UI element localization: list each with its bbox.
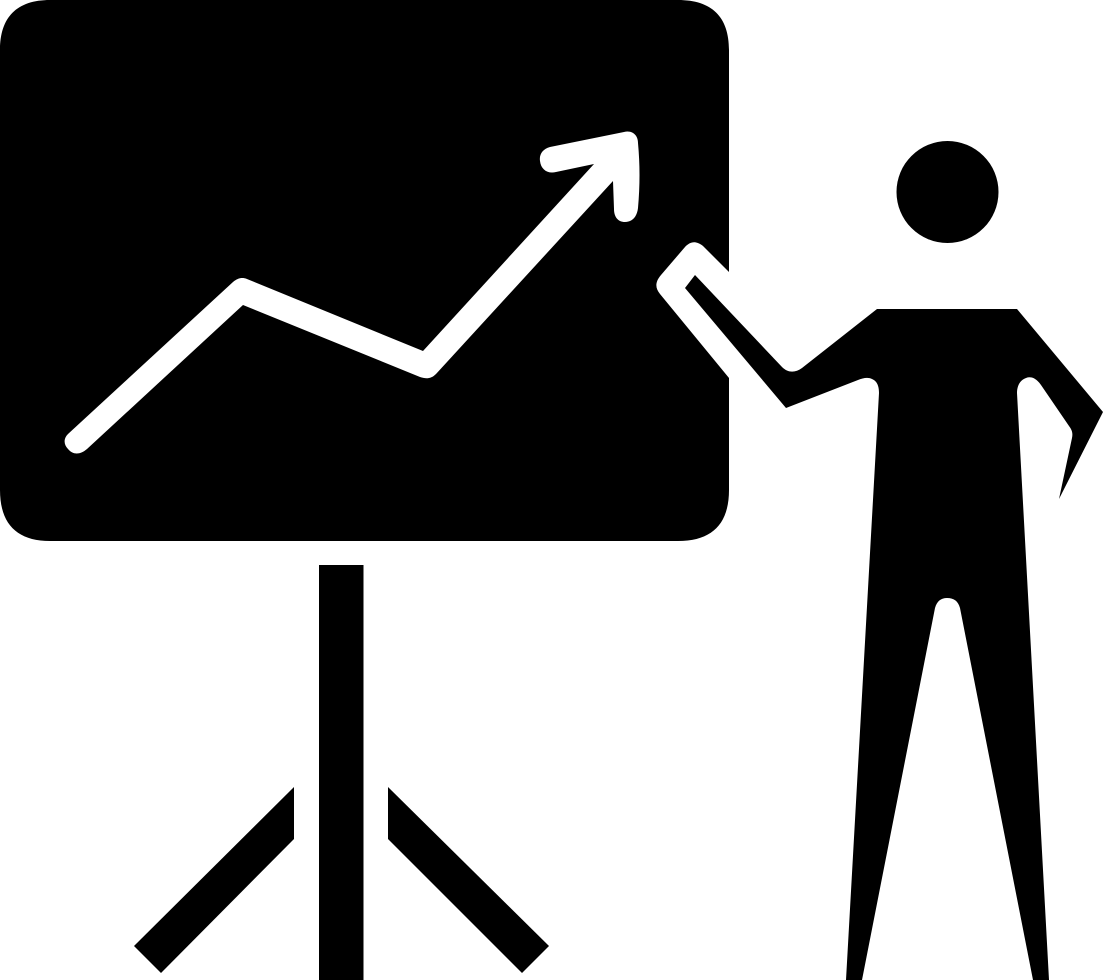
easel right leg: [388, 787, 549, 973]
person body: [685, 275, 1103, 980]
easel left leg: [134, 787, 294, 973]
rising arrow line: [65, 132, 640, 454]
presentation board: [0, 0, 729, 541]
easel pole: [319, 565, 364, 980]
person head: [896, 141, 998, 243]
